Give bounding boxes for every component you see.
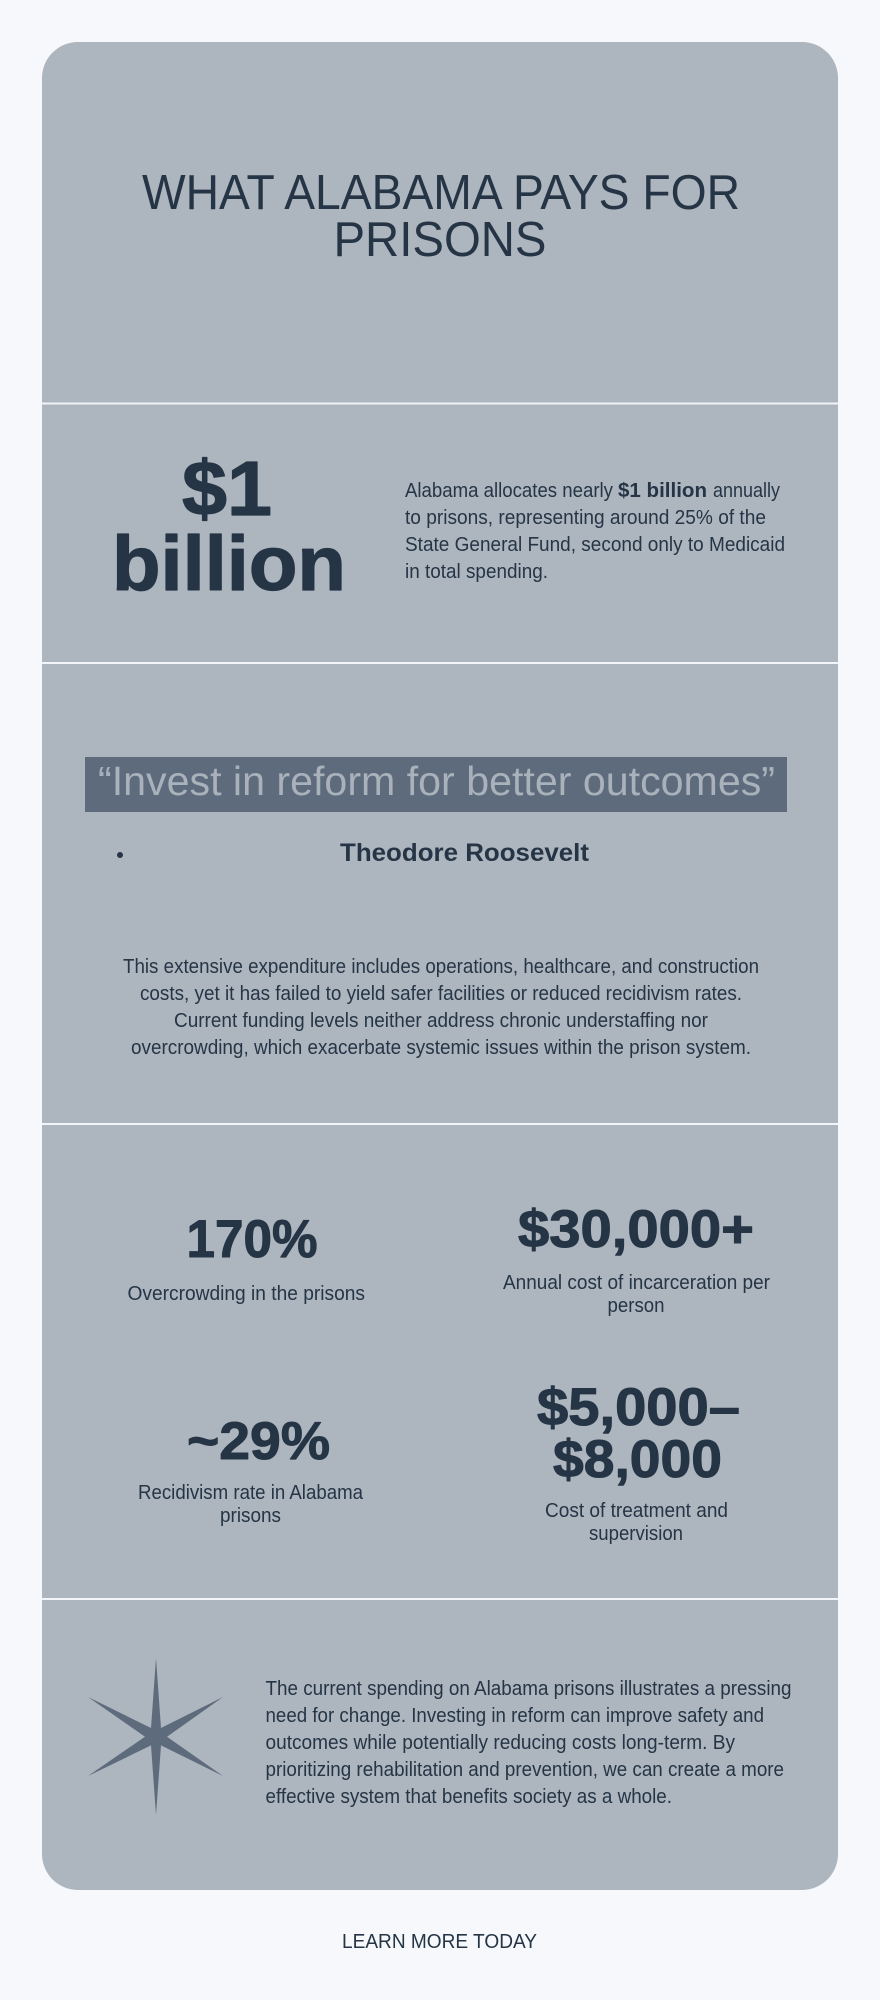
- stat: treatment cost: $5,000–: [537, 1378, 740, 1437]
- text block: allocation: annually: [713, 480, 780, 502]
- text block: call for change: The current spending on Alabama prisons illustrates a pressing: [266, 1678, 792, 1700]
- quote banner: “Invest in reform for better outcomes”: [98, 758, 775, 804]
- text block: allocation: to prisons, representing around 25% of the: [405, 507, 766, 529]
- text block: call for change: effective system that benefits society as a whole.: [266, 1786, 672, 1808]
- text block: allocation: Alabama allocates nearly: [405, 480, 613, 502]
- stat: treatment cost: [537, 1378, 740, 1545]
- text block: call for change: outcomes while potentially reducing costs long-term. By: [266, 1732, 735, 1754]
- stat: recidivism: ~29%: [187, 1412, 330, 1471]
- stat: annual cost: Annual cost of incarceration per: [503, 1272, 770, 1294]
- text block: expenditure: This extensive expenditure includes operations, healthcare, and construction: [123, 956, 759, 978]
- title: WHAT ALABAMA PAYS FOR: [142, 166, 740, 220]
- stat: recidivism: [138, 1412, 364, 1527]
- quote attribution: Theodore Roosevelt: [340, 839, 590, 867]
- stat: annual cost: $30,000+: [518, 1200, 754, 1259]
- text block: call for change: [266, 1678, 792, 1808]
- text block: expenditure: costs, yet it has failed to yield safer facilities or reduced recidivism rates.: [140, 983, 742, 1005]
- stat: overcrowding: 170%: [186, 1210, 318, 1269]
- quote attribution: [117, 839, 590, 867]
- stat: overcrowding: [128, 1210, 365, 1305]
- big number: $1 billion: billion: [112, 521, 346, 607]
- stat: recidivism: Recidivism rate in Alabama: [138, 1482, 364, 1504]
- icon: six-point star: [88, 1658, 223, 1815]
- big number: $1 billion: $1: [182, 446, 272, 532]
- stat: treatment cost: $8,000: [553, 1430, 722, 1489]
- stat: recidivism: prisons: [220, 1505, 281, 1527]
- stat: annual cost: person: [608, 1295, 664, 1317]
- title: PRISONS: [334, 213, 546, 267]
- text block: allocation: $1 billion: [618, 480, 707, 502]
- text block: expenditure: [123, 956, 759, 1059]
- text block: expenditure: Current funding levels neither address chronic understaffing nor: [174, 1010, 708, 1032]
- big number: $1 billion: [112, 446, 346, 607]
- text block: allocation: [405, 480, 785, 583]
- text block: call for change: need for change. Investing in reform can improve safety and: [266, 1705, 764, 1727]
- text block: call for change: prioritizing rehabilitation and prevention, we can create a more: [266, 1759, 784, 1781]
- stat: treatment cost: supervision: [589, 1523, 683, 1545]
- text block: expenditure: overcrowding, which exacerbate systemic issues within the prison system.: [131, 1037, 751, 1059]
- stat: annual cost: [503, 1200, 770, 1317]
- text block: allocation: State General Fund, second only to Medicaid: [405, 534, 785, 556]
- stat: overcrowding: Overcrowding in the prisons: [128, 1283, 365, 1305]
- footer call to action: LEARN MORE TODAY: [342, 1931, 537, 1953]
- text block: allocation: in total spending.: [405, 561, 548, 583]
- stat: treatment cost: Cost of treatment and: [545, 1500, 728, 1522]
- title: [142, 166, 740, 267]
